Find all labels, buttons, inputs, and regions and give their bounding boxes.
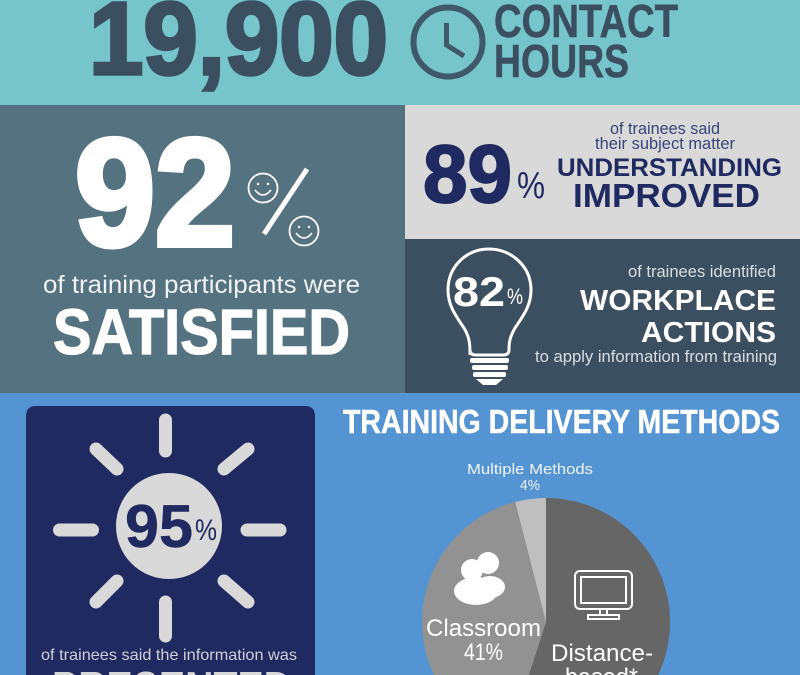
icon: smiley percent sign — [248, 169, 318, 246]
panel: understanding improved — [405, 105, 800, 239]
icon: light bulb with 82%: 82 — [453, 268, 505, 315]
label: workplace actions — [580, 285, 776, 349]
icon: sun with 95%: 95 — [125, 493, 193, 560]
label: understanding improved: IMPROVED — [573, 177, 760, 214]
text: of trainees said the information was: of trainees said the information was — [41, 647, 297, 664]
big number: 89%: 89 — [423, 129, 512, 220]
label: classroom 41%: 41% — [464, 639, 503, 666]
icon: clock — [414, 8, 482, 76]
panel: lower blue section — [0, 393, 800, 675]
icon: light bulb with 82%: % — [507, 284, 523, 309]
big number: 89%: % — [517, 165, 545, 207]
label: multiple methods 4% — [467, 461, 593, 494]
heading: contact hours — [494, 0, 678, 87]
panel: satisfied participants — [0, 105, 405, 393]
slice: classroom — [422, 502, 546, 675]
icon: sun with 95% — [60, 420, 280, 636]
heading: contact hours: HOURS — [494, 35, 629, 87]
text: of trainees said their subject matter: of trainees said — [610, 119, 720, 138]
panel: presented card — [26, 406, 315, 675]
icon: monitor — [575, 571, 632, 619]
icon: sun with 95%: % — [195, 514, 217, 547]
slice: distance-based — [529, 498, 670, 675]
slice: multiple methods — [515, 498, 546, 622]
icon: people — [454, 552, 505, 605]
big number: 92: 92 — [75, 108, 235, 278]
label: distance-based: Distance- — [551, 640, 653, 667]
label: satisfied: SATISFIED — [53, 296, 350, 368]
pie chart: delivery methods — [422, 498, 670, 675]
label: classroom 41%: Classroom — [426, 615, 541, 642]
text: to apply information from training: to apply information from training — [535, 347, 777, 366]
label: multiple methods 4%: 4% — [520, 477, 540, 494]
panel: workplace actions — [405, 239, 800, 393]
label: understanding improved: UNDERSTANDING — [557, 154, 782, 182]
panel: contact hours banner — [0, 0, 800, 105]
label: understanding improved — [557, 154, 782, 214]
text: of trainees said their subject matter — [595, 119, 735, 153]
label: workplace actions: ACTIONS — [641, 317, 776, 349]
text: of trainees identified: of trainees identified — [628, 262, 776, 281]
text: of trainees said their subject matter: their subject matter — [595, 134, 735, 153]
label: workplace actions: WORKPLACE — [580, 285, 776, 317]
text: of training participants were: of training participants were — [43, 271, 360, 299]
icon: light bulb with 82% — [448, 249, 531, 385]
label: multiple methods 4%: Multiple Methods — [467, 461, 593, 478]
label: classroom 41% — [426, 615, 541, 666]
